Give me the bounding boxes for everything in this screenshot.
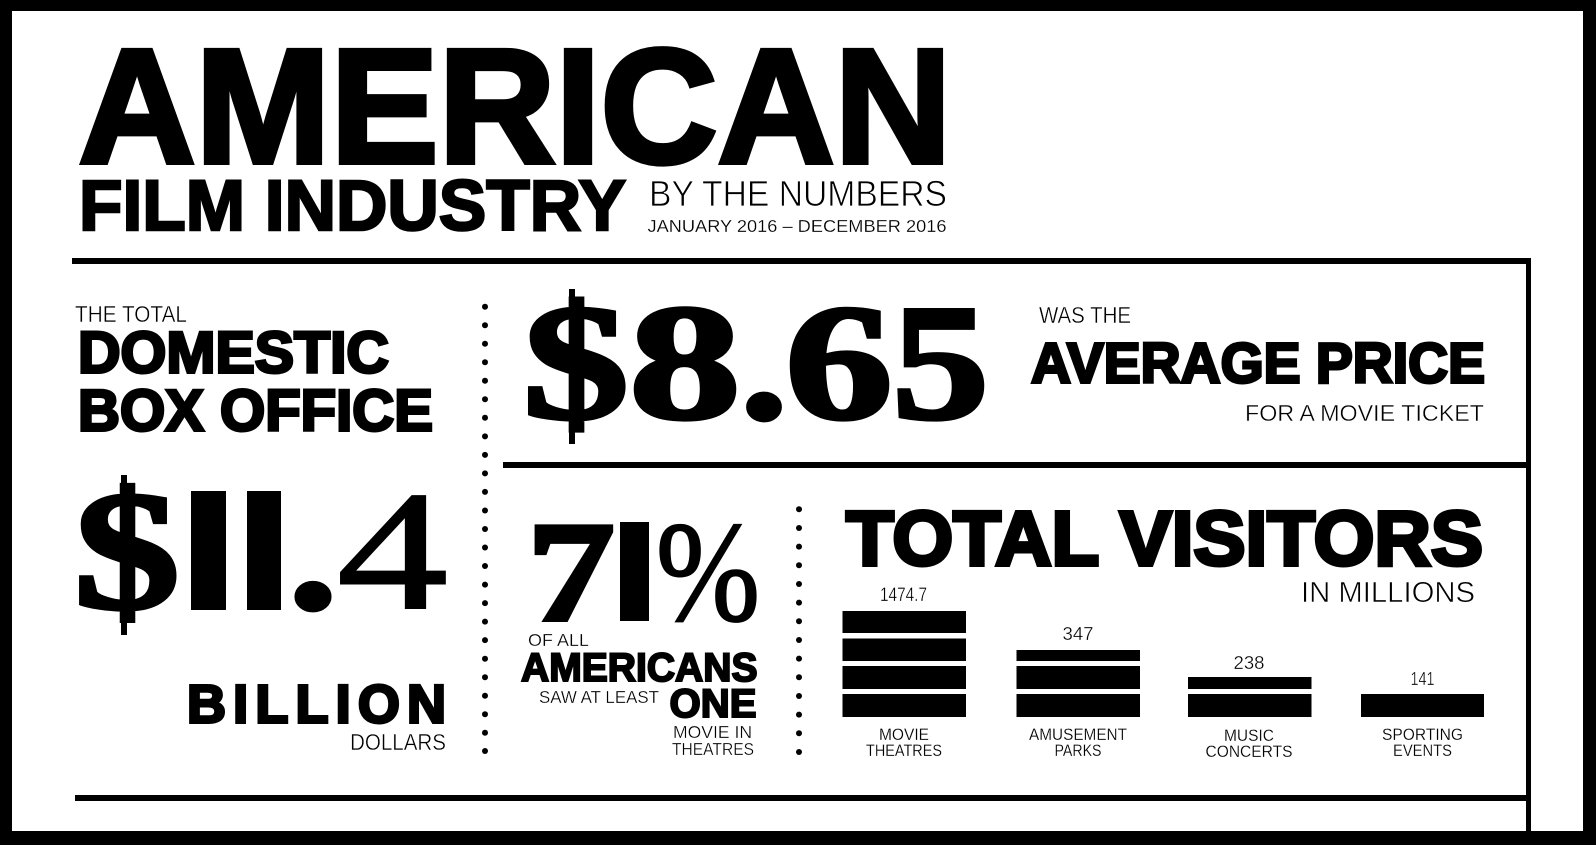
- lead-in text: WAS THE: [1039, 302, 1131, 328]
- bar: amusement parks: 347: [1062, 624, 1094, 644]
- big number: 71%: [534, 522, 757, 623]
- bar: amusement parks: PARKS: [1054, 742, 1102, 760]
- heading: box office: BOX OFFICE: [78, 378, 433, 444]
- big number: $8.65: 8: [629, 271, 741, 454]
- bar: music concerts: [1188, 653, 1312, 761]
- panel: 71 percent of Americans: [520, 522, 757, 755]
- big number: $11.4: $: [74, 457, 180, 645]
- bar: amusement parks: [1016, 624, 1140, 760]
- text: theatres: THEATRES: [672, 739, 754, 759]
- subtitle: Film Industry: FILM INDUSTRY: [79, 167, 626, 246]
- heading: total visitors: TOTAL VISITORS: [846, 496, 1483, 582]
- bar: sporting events: [1361, 669, 1484, 760]
- big number: 71%: 7: [527, 493, 615, 651]
- bar: music concerts: 238: [1234, 653, 1264, 673]
- panel: domestic box office: [74, 301, 448, 755]
- title: American: AMERICAN: [78, 14, 952, 198]
- bar: music concerts: MUSIC: [1224, 727, 1274, 745]
- big number: $11.4: [79, 475, 446, 635]
- subtitle: by the numbers: BY THE NUMBERS: [649, 173, 947, 214]
- big number: $11.4: 1: [192, 455, 326, 645]
- panel: average ticket price: [523, 271, 1485, 454]
- big number: $11.4: 4: [337, 457, 448, 645]
- unit: dollars: DOLLARS: [350, 729, 446, 755]
- text: of all: OF ALL: [528, 630, 589, 650]
- dotted divider: left: [482, 304, 488, 754]
- title block: [78, 14, 952, 246]
- bar: movie theatres: THEATRES: [866, 742, 942, 760]
- caption: FOR A MOVIE TICKET: [1245, 400, 1484, 426]
- text: saw at least: SAW AT LEAST: [539, 687, 659, 707]
- text: Americans: AMERICANS: [521, 646, 758, 690]
- big number: $8.65: 5: [892, 271, 989, 454]
- bar chart: [842, 585, 1484, 761]
- lead-in text: THE TOTAL: [75, 301, 187, 327]
- bar: sporting events: 141: [1410, 669, 1434, 689]
- big number: $8.65: $: [523, 271, 629, 454]
- big number: $11.4: .: [288, 457, 338, 645]
- big number: $8.65: .: [740, 271, 788, 454]
- big number: 71%: 1: [574, 492, 686, 651]
- big number: $8.65: 6: [785, 271, 893, 454]
- big number: 71%: %: [656, 493, 760, 651]
- bar: music concerts: CONCERTS: [1206, 743, 1292, 761]
- big number: $11.4: 1: [136, 455, 270, 645]
- big number: $8.65: [523, 271, 989, 454]
- text: movie in: MOVIE IN: [673, 722, 752, 742]
- dotted divider: right: [796, 506, 802, 755]
- unit: billion: BILLION: [187, 674, 446, 734]
- bar: amusement parks: AMUSEMENT: [1029, 726, 1127, 744]
- bar: movie theatres: 1474.7: [880, 585, 927, 606]
- bar: sporting events: EVENTS: [1393, 742, 1452, 760]
- text: one: ONE: [670, 682, 756, 726]
- frame rules: [72, 258, 1531, 831]
- bar: sporting events: SPORTING: [1382, 726, 1463, 744]
- bar: movie theatres: MOVIE: [879, 726, 929, 744]
- heading: average price: AVERAGE PRICE: [1031, 332, 1485, 396]
- date range: JANUARY 2016 – DECEMBER 2016: [648, 216, 946, 236]
- caption: in millions: IN MILLIONS: [1301, 577, 1475, 609]
- heading: domestic: DOMESTIC: [78, 320, 389, 386]
- panel: total visitors: [842, 496, 1484, 761]
- bar: movie theatres: [842, 585, 966, 760]
